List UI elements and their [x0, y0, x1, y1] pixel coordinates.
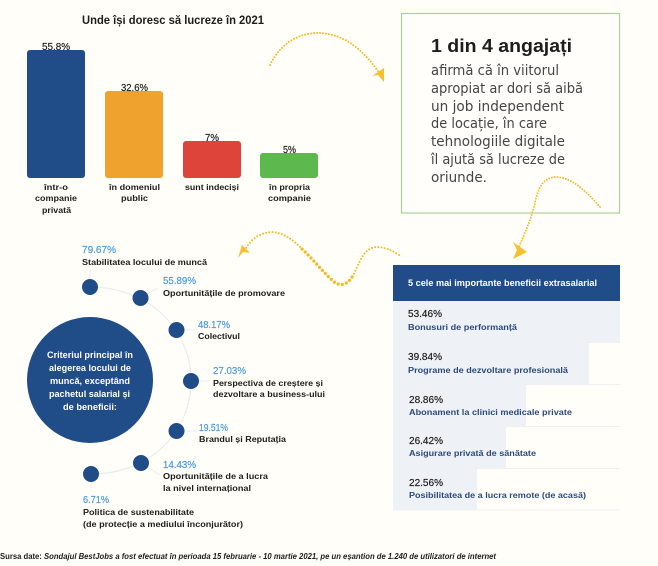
criterion: brand and reputation	[168, 422, 286, 444]
criterion: sustainability policy	[83, 466, 243, 529]
bar: undecided	[183, 132, 241, 192]
callout body text: tehnologiile digitale	[431, 134, 565, 150]
benefit: remote work	[393, 469, 586, 510]
criterion: business growth	[183, 365, 325, 399]
arrow: benefits table to criteria	[238, 232, 399, 284]
criterion: colleagues: Colectivul	[198, 331, 240, 341]
bar: undecided: sunt indeciși	[185, 182, 239, 192]
callout body text: oriunde.	[431, 170, 487, 186]
benefit: private health insurance: Asigurare privată de sănătate	[409, 448, 536, 458]
arrow: chart to callout	[270, 33, 384, 82]
criterion: business growth: 27.03%	[213, 365, 246, 377]
bar: private company	[27, 41, 85, 215]
bar chart: where they want to work in 2021	[27, 15, 318, 215]
bar: public sector: 32.6%	[121, 82, 148, 94]
bar: private company: într-o	[43, 182, 68, 192]
bar: private company: companie	[35, 193, 77, 203]
chart title: Unde își doresc să lucreze în 2021	[82, 15, 265, 27]
criterion: promotion opportunities	[132, 275, 285, 306]
criterion: sustainability policy: (de protecție a mediului înconjurător)	[83, 519, 243, 529]
bar: own company	[260, 144, 318, 203]
callout body text	[430, 63, 583, 186]
criterion: sustainability policy: Politica de sustenabilitate	[83, 507, 194, 517]
callout body text: afirmă că în viitorul	[431, 63, 559, 79]
bar: own company: companie	[268, 193, 311, 203]
bar: public sector	[105, 82, 163, 203]
criterion: colleagues	[168, 319, 240, 341]
criterion: international opportunities: la nivel internațional	[163, 483, 251, 493]
benefit: performance bonuses: Bonusuri de performanță	[408, 322, 517, 332]
criterion: job stability	[82, 244, 207, 295]
criterion: colleagues: 48.17%	[198, 319, 230, 331]
bar: private company: 55.8%	[42, 41, 70, 53]
criterion: brand and reputation: 19.51%	[199, 422, 228, 434]
bar: private company: privată	[42, 205, 71, 215]
bar: public sector: în domeniul	[108, 182, 160, 192]
benefit: professional development: 39.84%	[408, 351, 442, 363]
criterion: promotion opportunities: Oportunitățile de promovare	[163, 288, 285, 298]
panel header	[393, 265, 620, 301]
panel: top 5 benefits	[393, 265, 620, 510]
central circle: pachetul salarial și	[49, 389, 130, 400]
criterion: international opportunities: 14.43%	[163, 459, 196, 471]
criterion: international opportunities: Oportunitățile de a lucra	[163, 471, 268, 481]
benefit: professional development	[393, 343, 589, 384]
benefit: performance bonuses: 53.46%	[408, 308, 442, 320]
bar: own company: în propria	[268, 182, 310, 192]
callout body text: de locație, în care	[431, 116, 547, 132]
benefit: remote work: Posibilitatea de a lucra remote (de acasă)	[409, 490, 586, 500]
callout body text: un job independent	[431, 99, 565, 115]
benefit: remote work: 22.56%	[409, 477, 443, 489]
benefit: private health insurance	[393, 427, 536, 468]
benefit: performance bonuses	[393, 301, 620, 342]
source note: Sursa date: Sondajul BestJobs a fost efectuat în perioada 15 februarie - 10 martie 2021, pe un eșantion de 1.240 de utilizatori de internet	[0, 552, 496, 561]
criterion: business growth: Perspectiva de creștere și	[213, 378, 323, 388]
criterion: promotion opportunities: 55.89%	[163, 275, 196, 287]
central circle: de beneficii:	[63, 402, 117, 413]
central circle: alegerea locului de	[49, 363, 131, 374]
benefit: private clinics	[393, 385, 572, 426]
criterion: job stability: 79.67%	[82, 244, 116, 256]
radial diagram: main criteria	[27, 244, 325, 529]
bar: own company: 5%	[283, 144, 296, 156]
callout body text: îl ajută să lucreze de	[430, 152, 565, 168]
criterion: sustainability policy: 6.71%	[83, 494, 109, 506]
benefit: private clinics: 28.86%	[409, 394, 443, 406]
benefit: private clinics: Abonament la clinici medicale private	[409, 407, 572, 417]
bar: public sector: public	[121, 193, 148, 203]
central circle: Criteriul principal în	[47, 350, 133, 361]
callout: 1 in 4 employees	[402, 14, 620, 213]
bar: undecided: 7%	[205, 132, 219, 144]
criterion: international opportunities	[133, 455, 268, 493]
criterion: job stability: Stabilitatea locului de muncă	[82, 257, 207, 267]
criterion: brand and reputation: Brandul și Reputația	[199, 434, 286, 444]
panel header: 5 cele mai importante beneficii extrasalarial	[408, 278, 597, 289]
callout heading: 1 din 4 angajați	[431, 36, 572, 56]
arrow: callout to benefits table	[513, 177, 600, 259]
criterion: business growth: dezvoltare a business-ului	[213, 389, 325, 399]
central circle	[27, 317, 153, 443]
callout body text: apropiat ar dori să aibă	[431, 81, 583, 97]
benefit: professional development: Programe de dezvoltare profesională	[408, 365, 568, 375]
benefit: private health insurance: 26.42%	[409, 435, 443, 447]
central circle: muncă, exceptând	[50, 376, 130, 387]
